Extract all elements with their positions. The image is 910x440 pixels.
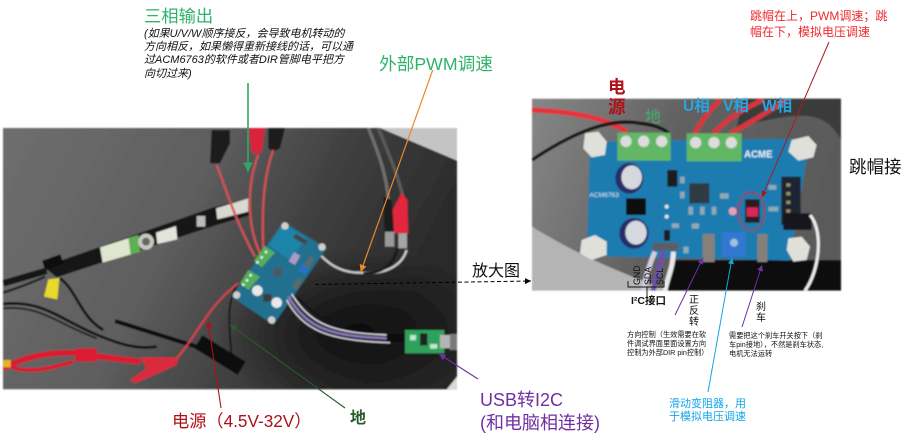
note: phase order: 方向相反，如果懒得重新接线的话，可以通 <box>144 40 355 53</box>
note: phase order: 过ACM6763的软件或者DIR管脚电平把方 <box>144 53 346 66</box>
arrow: ground <box>230 325 345 408</box>
label: USB to I2C: USB转I2C <box>480 390 563 410</box>
label: U V W phases: W相 <box>762 97 792 115</box>
labels: I2C pins: SCL <box>655 268 665 285</box>
note: potentiometer: 于模拟电压调速 <box>669 409 746 423</box>
label: power supply range: 电源（4.5V-32V） <box>172 411 311 431</box>
driver board <box>232 222 327 325</box>
ACME logo: ACME <box>744 149 773 160</box>
photo: full wiring setup <box>3 128 458 389</box>
label: power terminal: 源 <box>608 97 626 117</box>
pin headers and potentiometer <box>703 177 812 262</box>
heading: external PWM speed control: 外部PWM调速 <box>379 54 493 74</box>
nylon standoffs <box>580 132 817 262</box>
arrow: external PWM <box>361 70 433 272</box>
label: power terminal: 电 <box>608 77 626 97</box>
board name: ACM6763 <box>589 192 619 199</box>
arrow: power <box>208 321 221 408</box>
arrow: magnified view <box>315 281 531 284</box>
label: direction switch: 转 <box>689 315 699 328</box>
note: jumper positions: 帽在下，模拟电压调速 <box>750 24 870 39</box>
labels: I2C pins: GND <box>632 265 642 285</box>
label: direction switch: 反 <box>689 305 699 317</box>
arrow: jumper <box>762 42 829 197</box>
bracket: I2C pins <box>628 281 664 295</box>
label: U V W phases: U相 <box>683 97 710 115</box>
label: magnified view: 放大图 <box>472 262 520 280</box>
note: brake control: 车pin接地），不然是刹车状态, <box>729 340 823 349</box>
note: phase order: (如果U/V/W顺序接反，会导致电机转动的 <box>144 27 346 40</box>
heading: three-phase output: 三相输出 <box>144 6 213 26</box>
labels: I2C pins <box>632 265 665 285</box>
PWM wires and clips <box>308 128 408 273</box>
capacitors and components <box>615 163 778 253</box>
note: direction control: 控制为外部DIR pin控制） <box>627 348 708 357</box>
label: ground: 地 <box>350 409 366 427</box>
arrow: USB to I2C <box>439 354 478 379</box>
label: brake switch: 车 <box>756 311 766 324</box>
note: brake control: 电机无法运转 <box>729 349 772 358</box>
label: I2C interface: I²C接口 <box>631 294 666 307</box>
note: direction control: 方向控制（生效需要在软 <box>627 330 706 339</box>
note: jumper positions: 跳帽在上，PWM调速；跳 <box>750 8 887 23</box>
jumper and red marker circle <box>729 192 765 230</box>
I2C wires <box>643 252 673 291</box>
arrow: direction switch <box>675 258 703 315</box>
labels: I2C pins: SDA <box>643 267 653 285</box>
white motor wire <box>805 215 818 291</box>
label: jumper connection: 跳帽接 <box>849 157 902 177</box>
label: ground terminal: 地 <box>645 108 661 126</box>
note: phase order: 向切过来) <box>144 67 192 80</box>
note: potentiometer: 滑动变阻器，用 <box>669 396 746 410</box>
arrow: three-phase output <box>247 83 249 172</box>
note: brake control: 需要把这个刹车开关按下（刹 <box>729 331 822 340</box>
label: U V W phases: V相 <box>723 97 749 115</box>
three phase wires and clips <box>210 128 285 257</box>
input wires <box>532 100 787 160</box>
blue circuit board <box>587 138 810 261</box>
label: direction switch: 正 <box>689 295 699 306</box>
arrow: potentiometer <box>708 258 732 392</box>
oscilloscope probe <box>3 198 251 299</box>
note: direction control: 件调试界面里面设置方向 <box>627 339 706 348</box>
black cables and clip, lower left <box>3 278 242 368</box>
screw terminals <box>617 133 742 161</box>
purple I2C wires <box>287 294 405 343</box>
photo: enlarged driver board <box>532 99 841 291</box>
label: brake switch: 刹 <box>756 301 766 313</box>
arrow: brake switch <box>742 265 762 327</box>
label: USB to I2C: (和电脑相连接) <box>480 413 600 433</box>
USB to I2C module <box>405 330 458 353</box>
red clip and power wire <box>3 283 238 383</box>
